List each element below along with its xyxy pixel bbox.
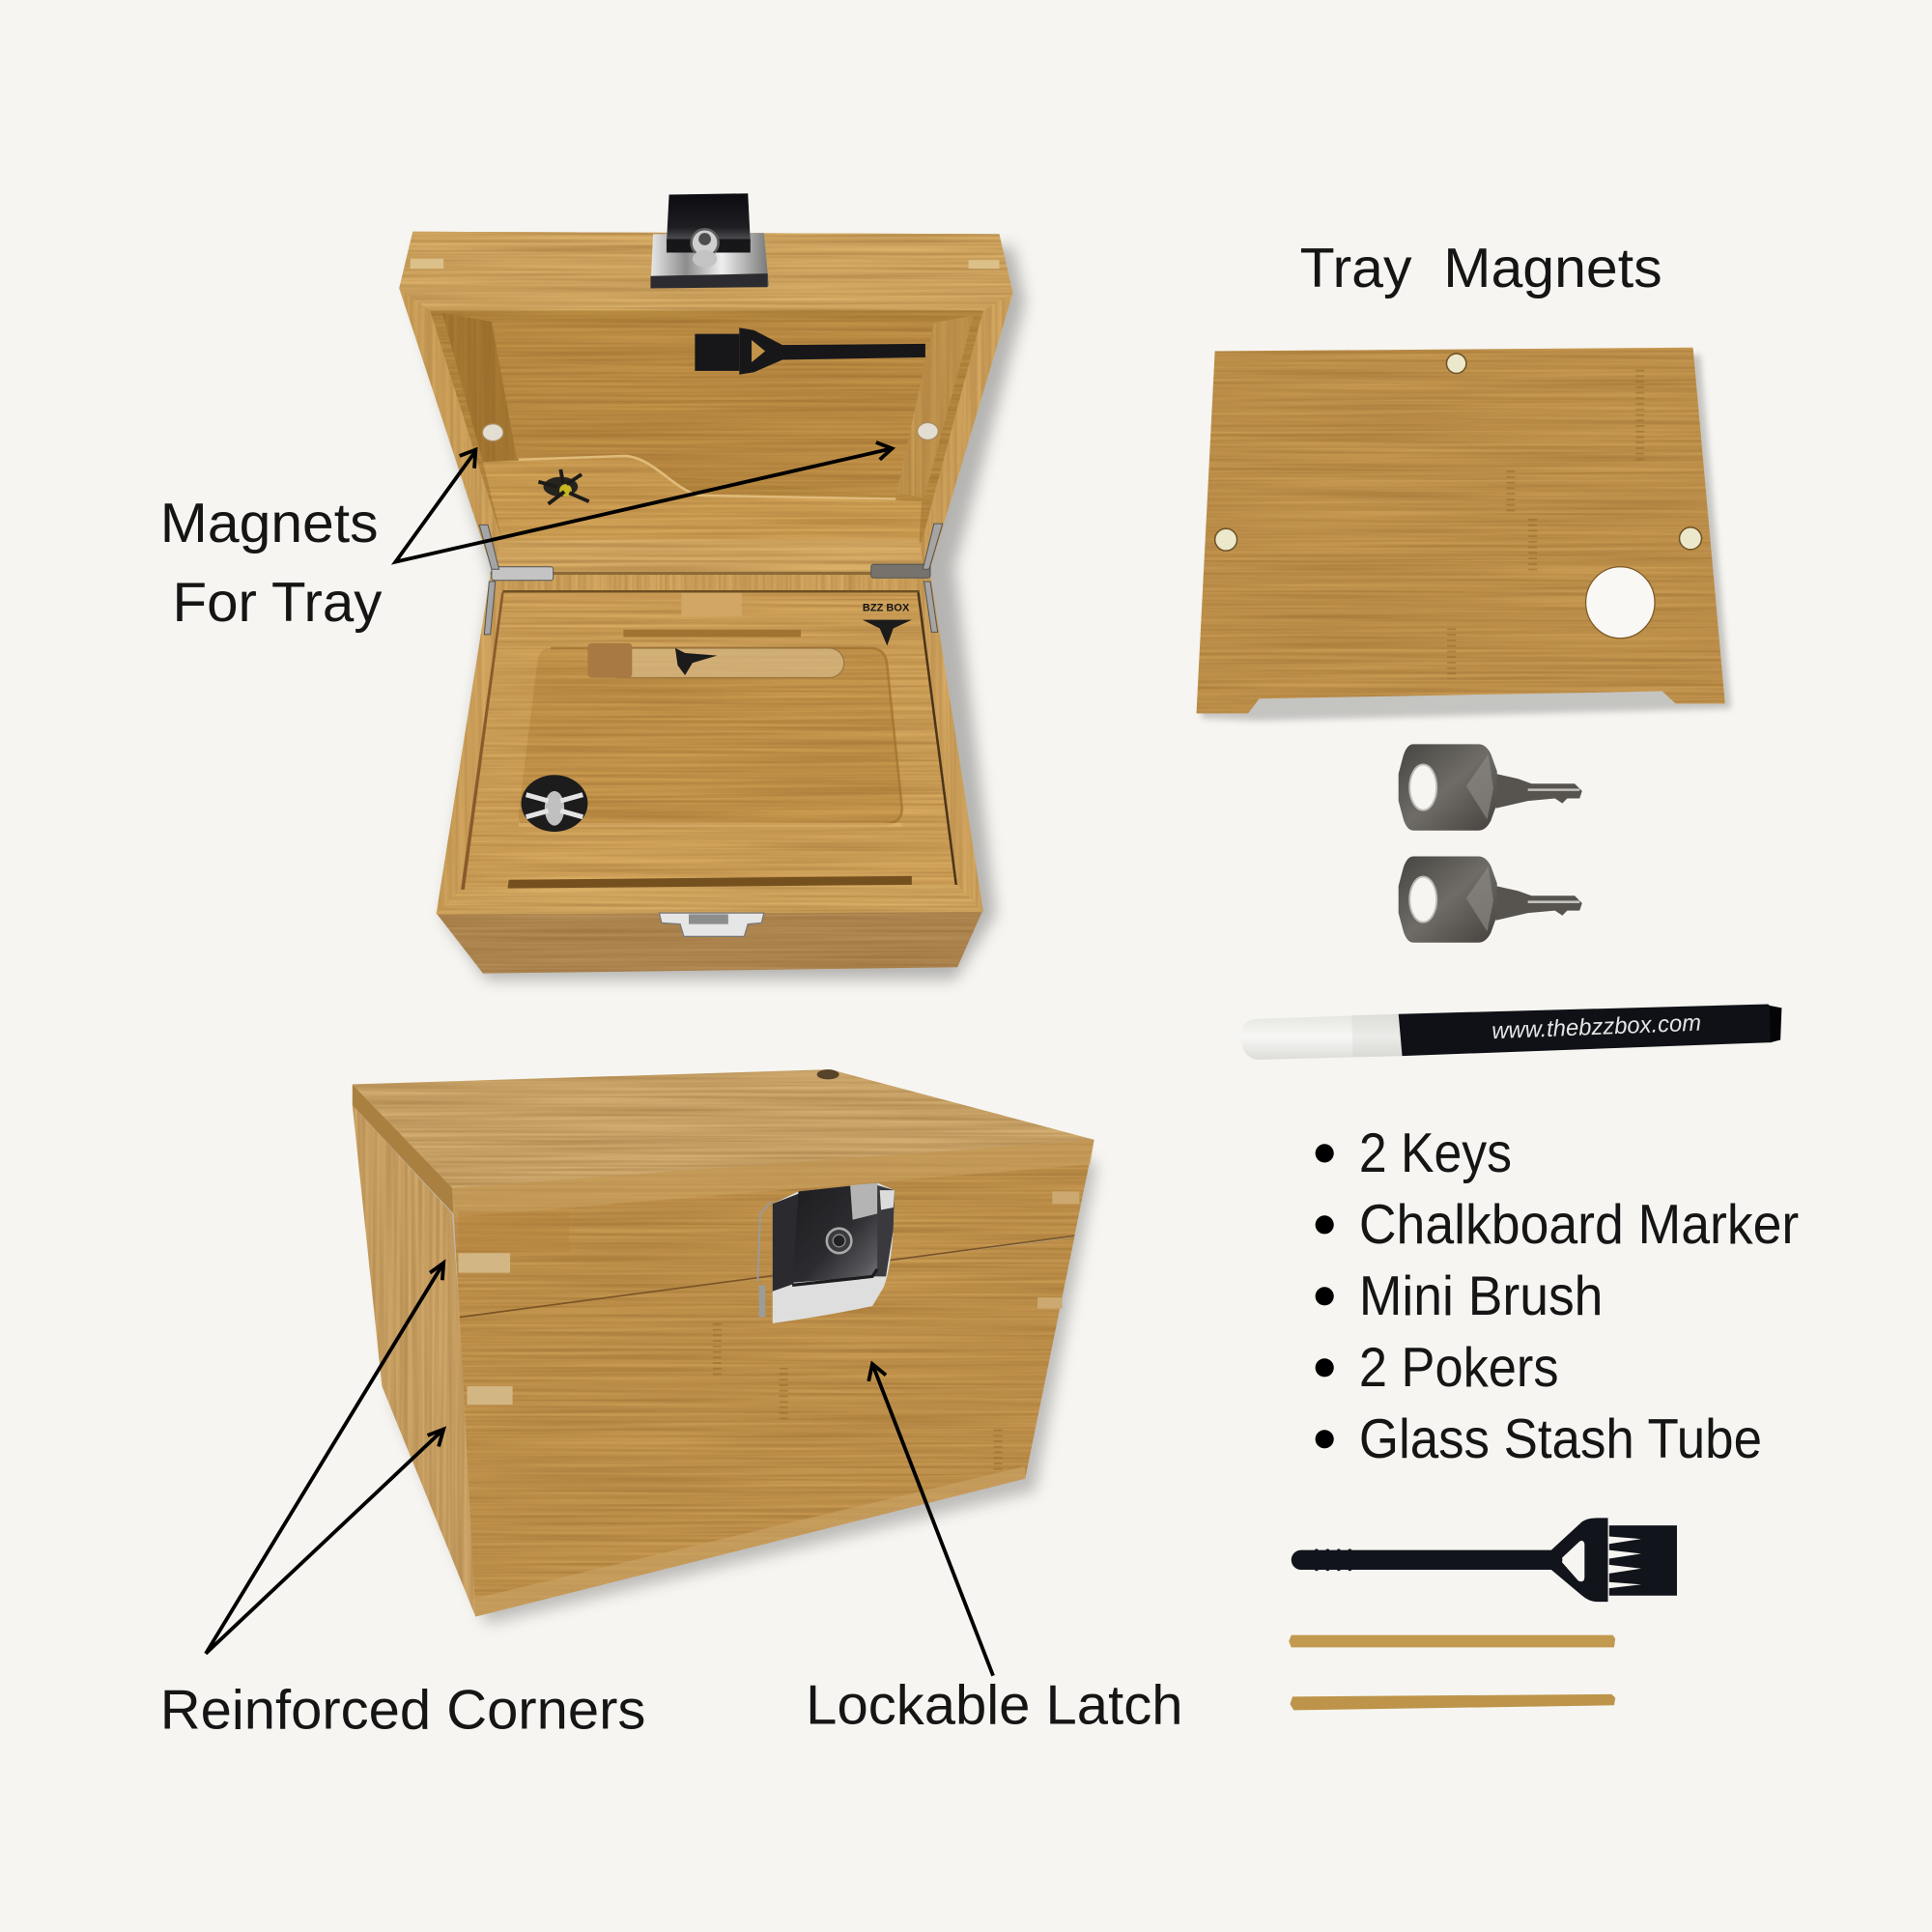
lid latch — [650, 193, 769, 288]
bullet list: Chalkboard Marker — [1359, 1194, 1799, 1256]
lid magnet right — [918, 423, 938, 440]
label: magnets for tray: Magnets — [160, 493, 379, 554]
bullet list — [1316, 1122, 1799, 1470]
box body — [437, 572, 983, 974]
label: reinforced corners: Reinforced Corners — [160, 1680, 645, 1742]
latch arrow — [868, 1364, 993, 1676]
hinges — [479, 524, 943, 635]
bullet list: 2 Keys — [1359, 1122, 1512, 1184]
tray slot front — [508, 876, 912, 889]
label: magnets for tray: For Tray — [173, 572, 383, 634]
bamboo knots — [717, 1323, 998, 1471]
tray round hole — [1586, 567, 1655, 639]
open lid — [399, 232, 1012, 572]
bamboo knots on tray — [1452, 370, 1640, 679]
label: lockable latch: Lockable Latch — [806, 1674, 1182, 1736]
tray recess — [519, 648, 902, 825]
magnet top — [1446, 354, 1466, 373]
dovetail patches on lid — [411, 259, 999, 269]
heading: tray magnets: Tray Magnets — [1300, 238, 1662, 299]
glass tube with cork — [587, 643, 844, 678]
bullet list: Mini Brush — [1359, 1265, 1603, 1327]
logo mark: BZZ BOX — [863, 603, 910, 614]
tray shadow — [1202, 355, 1731, 721]
logo mark — [863, 603, 912, 645]
chalkboard marker: www.thebzzbox.com — [1492, 1010, 1702, 1044]
key two — [1399, 856, 1582, 943]
closed box left side — [353, 1105, 475, 1616]
chalkboard marker — [1240, 1005, 1781, 1060]
brush stored in lid — [695, 327, 925, 375]
lid magnet left — [482, 424, 503, 441]
magnets arrows — [395, 442, 892, 562]
poker one — [1289, 1635, 1615, 1647]
front latch — [659, 913, 764, 936]
tray block — [681, 593, 742, 616]
tray underside with magnets — [1197, 348, 1731, 721]
removable tray — [461, 590, 957, 890]
magnet left — [1215, 528, 1237, 551]
top screw mark — [817, 1069, 839, 1079]
closed box top — [353, 1069, 1094, 1188]
lockable latch — [757, 1182, 895, 1323]
seam — [460, 1236, 1074, 1318]
closed box photo — [353, 1069, 1096, 1624]
tray hole with bee print — [522, 775, 587, 832]
corners arrows — [206, 1263, 443, 1654]
poker two — [1290, 1694, 1615, 1710]
box shadow — [412, 246, 1025, 980]
closed box lid front — [452, 1140, 1094, 1318]
bee figure — [538, 469, 589, 504]
closed box body front — [460, 1237, 1074, 1616]
label: magnets for tray — [160, 493, 383, 634]
closed box left lid edge — [353, 1084, 453, 1213]
open box photo — [399, 193, 1025, 980]
key one — [1399, 744, 1582, 831]
bullet list: 2 Pokers — [1359, 1337, 1559, 1399]
closed box shadow — [370, 1109, 1096, 1624]
reinforced corner patches — [458, 1191, 1079, 1405]
bullet list: Glass Stash Tube — [1359, 1408, 1762, 1470]
mini brush — [1292, 1518, 1677, 1602]
magnet right — [1680, 527, 1701, 550]
tray board — [1197, 348, 1725, 714]
tray slot middle — [623, 630, 801, 637]
